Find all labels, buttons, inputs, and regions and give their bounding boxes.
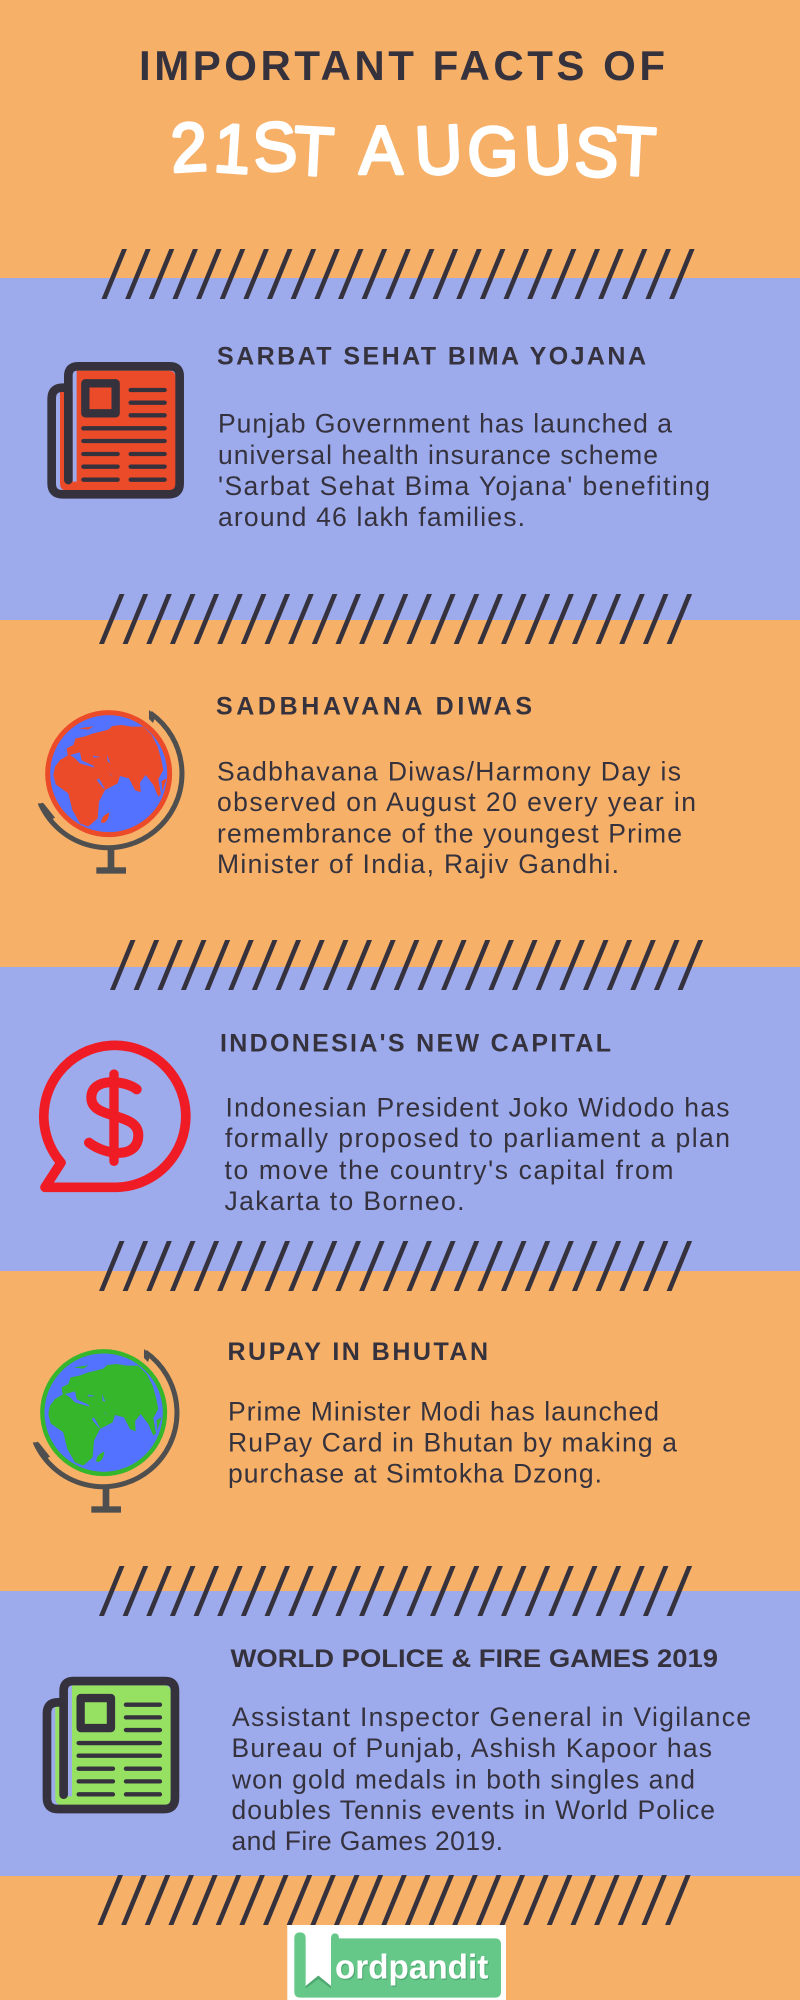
title: date: 21ST AUGUST (169, 107, 658, 193)
text block: Indonesian President Joko Widodo has (226, 1092, 730, 1122)
text block: Prime Minister Modi has launched (228, 1396, 659, 1426)
text block: Bureau of Punjab, Ashish Kapoor has (232, 1733, 712, 1763)
text block: formally proposed to parliament a plan (225, 1123, 730, 1153)
heading: SARBAT SEHAT BIMA YOJANA (217, 342, 646, 370)
text block: Punjab Government has launched a (218, 408, 672, 438)
text block: 'Sarbat Sehat Bima Yojana' benefiting (218, 471, 710, 501)
text block: and Fire Games 2019. (232, 1826, 503, 1856)
text block: purchase at Simtokha Dzong. (228, 1458, 602, 1488)
heading: INDONESIA'S NEW CAPITAL (220, 1030, 611, 1058)
text block: doubles Tennis events in World Police (232, 1795, 715, 1825)
logo: wordpandit (287, 1925, 506, 2000)
text block (218, 408, 710, 532)
text block (224, 1092, 730, 1216)
logo: wordpandit: ordpandit (335, 1949, 488, 1987)
title: important facts of: IMPORTANT FACTS OF (139, 42, 665, 89)
text block (217, 756, 696, 879)
text block: Minister of India, Rajiv Gandhi. (217, 849, 619, 879)
text block: remembrance of the youngest Prime (217, 818, 682, 848)
panel: header (0, 0, 800, 278)
panel: Indonesia's New Capital (0, 967, 800, 1271)
text block: Sadbhavana Diwas/Harmony Day is (217, 756, 681, 786)
text block: universal health insurance scheme (218, 440, 658, 470)
icon: red newspaper (52, 366, 180, 494)
text block: observed on August 20 every year in (217, 787, 696, 817)
text block: around 46 lakh families. (218, 502, 525, 532)
heading: RUPAY IN BHUTAN (228, 1338, 488, 1366)
icon: green newspaper (47, 1681, 175, 1809)
icon: dollar speech bubble (44, 1045, 186, 1187)
text block: Assistant Inspector General in Vigilance (232, 1702, 751, 1732)
heading: WORLD POLICE & FIRE GAMES 2019 (230, 1645, 718, 1673)
icon: red globe (38, 710, 182, 874)
icon: green globe (33, 1349, 177, 1513)
heading: SADBHAVANA DIWAS (216, 692, 532, 720)
text block (231, 1702, 751, 1856)
panel: RuPay in Bhutan (0, 1271, 800, 1591)
text block: to move the country's capital from (224, 1155, 674, 1185)
panel: Sadbhavana Diwas (0, 620, 800, 967)
panel: Sarbat Sehat Bima Yojana (0, 278, 800, 620)
panel: World Police & Fire Games 2019 (0, 1591, 800, 1876)
text block: Jakarta to Borneo. (224, 1186, 464, 1216)
text block: won gold medals in both singles and (231, 1764, 695, 1794)
text block (228, 1396, 677, 1488)
text block: RuPay Card in Bhutan by making a (228, 1428, 677, 1458)
